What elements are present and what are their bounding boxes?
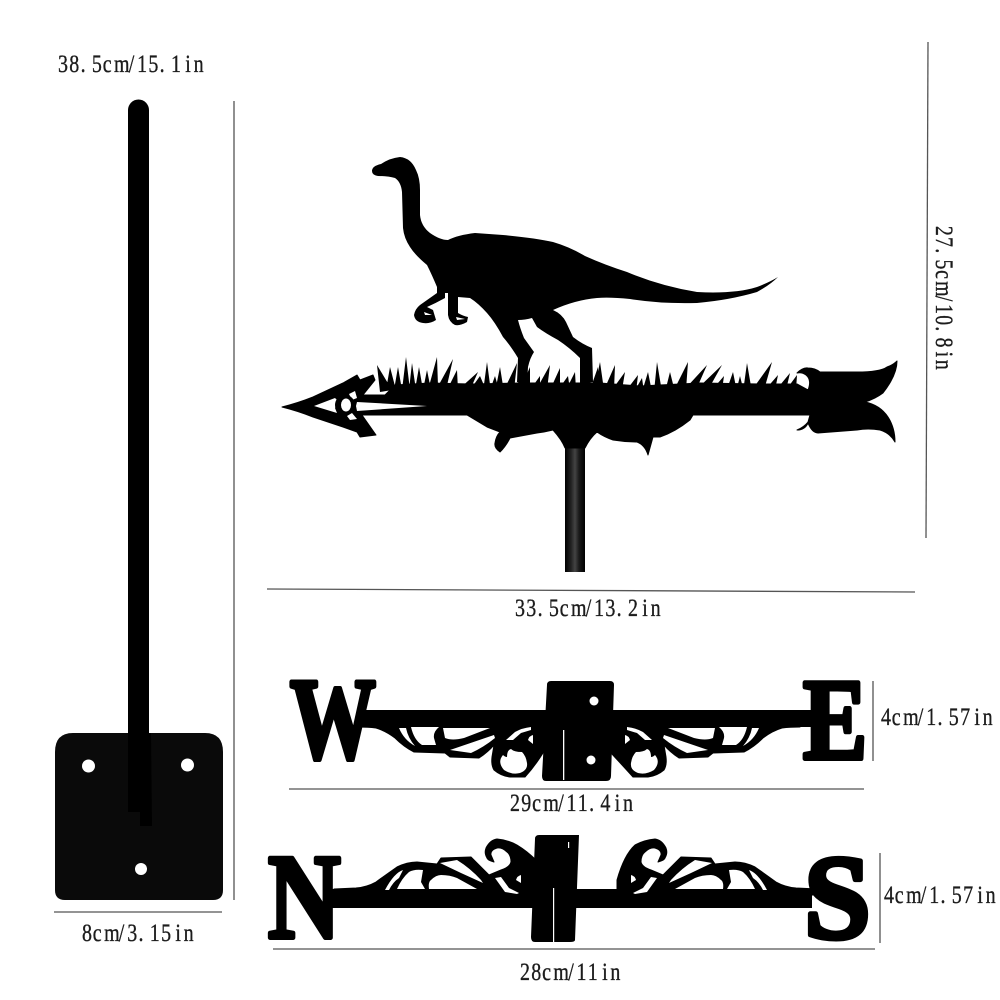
dimension: west-east height (873, 681, 993, 761)
dimension: north-south height (880, 853, 996, 943)
left scrollwork (358, 720, 548, 777)
pole bracket on plate (128, 733, 152, 826)
center bracket (531, 835, 579, 942)
dimension: vane width (267, 589, 915, 622)
panel: dinosaur weathervane (282, 157, 897, 572)
arrowhead cutouts (314, 391, 427, 420)
center bracket (542, 681, 614, 781)
letter W: W (290, 656, 376, 784)
grass blades (377, 357, 797, 392)
left scrollwork (334, 839, 536, 895)
dimension label: 8cm: 8cm/3.15in (82, 919, 194, 947)
letter N: N (268, 831, 341, 965)
letter S: S (804, 831, 871, 964)
dimension label: 28cm: 28cm/11in (520, 958, 620, 986)
dinosaur silhouette (372, 157, 778, 384)
dimension label: 33.5cm: 33.5cm/13.2in (515, 594, 661, 622)
pole (128, 100, 149, 733)
right scrollwork (610, 720, 800, 777)
panel: north-south direction bar (268, 831, 871, 965)
dimension label: 38.5cm: 38.5cm/15.1in (58, 50, 204, 78)
dimension label: 4cm west-east: 4cm/1.57in (881, 703, 993, 731)
letter E: E (803, 656, 867, 785)
panel: west-east direction bar (290, 656, 867, 785)
right scrollwork (617, 839, 818, 895)
dimension label: 27.5cm: 27.5cm/10.8in (930, 226, 958, 370)
dimension label: 4cm north-south: 4cm/1.57in (884, 881, 996, 909)
arrowhead ring (335, 395, 355, 415)
bar (332, 889, 812, 908)
dimension label: 29cm: 29cm/11.4in (510, 789, 633, 817)
base plate (55, 733, 223, 900)
mounting holes (82, 758, 194, 875)
bracket holes and slit (563, 696, 598, 780)
bar (362, 710, 812, 727)
claw notches (424, 312, 465, 320)
bracket slits (553, 842, 569, 942)
panel: mounting pole and base plate (55, 100, 223, 900)
arrow with grass base and scrollwork (282, 361, 897, 455)
arrowhead eye (341, 398, 351, 412)
support post (565, 446, 585, 572)
